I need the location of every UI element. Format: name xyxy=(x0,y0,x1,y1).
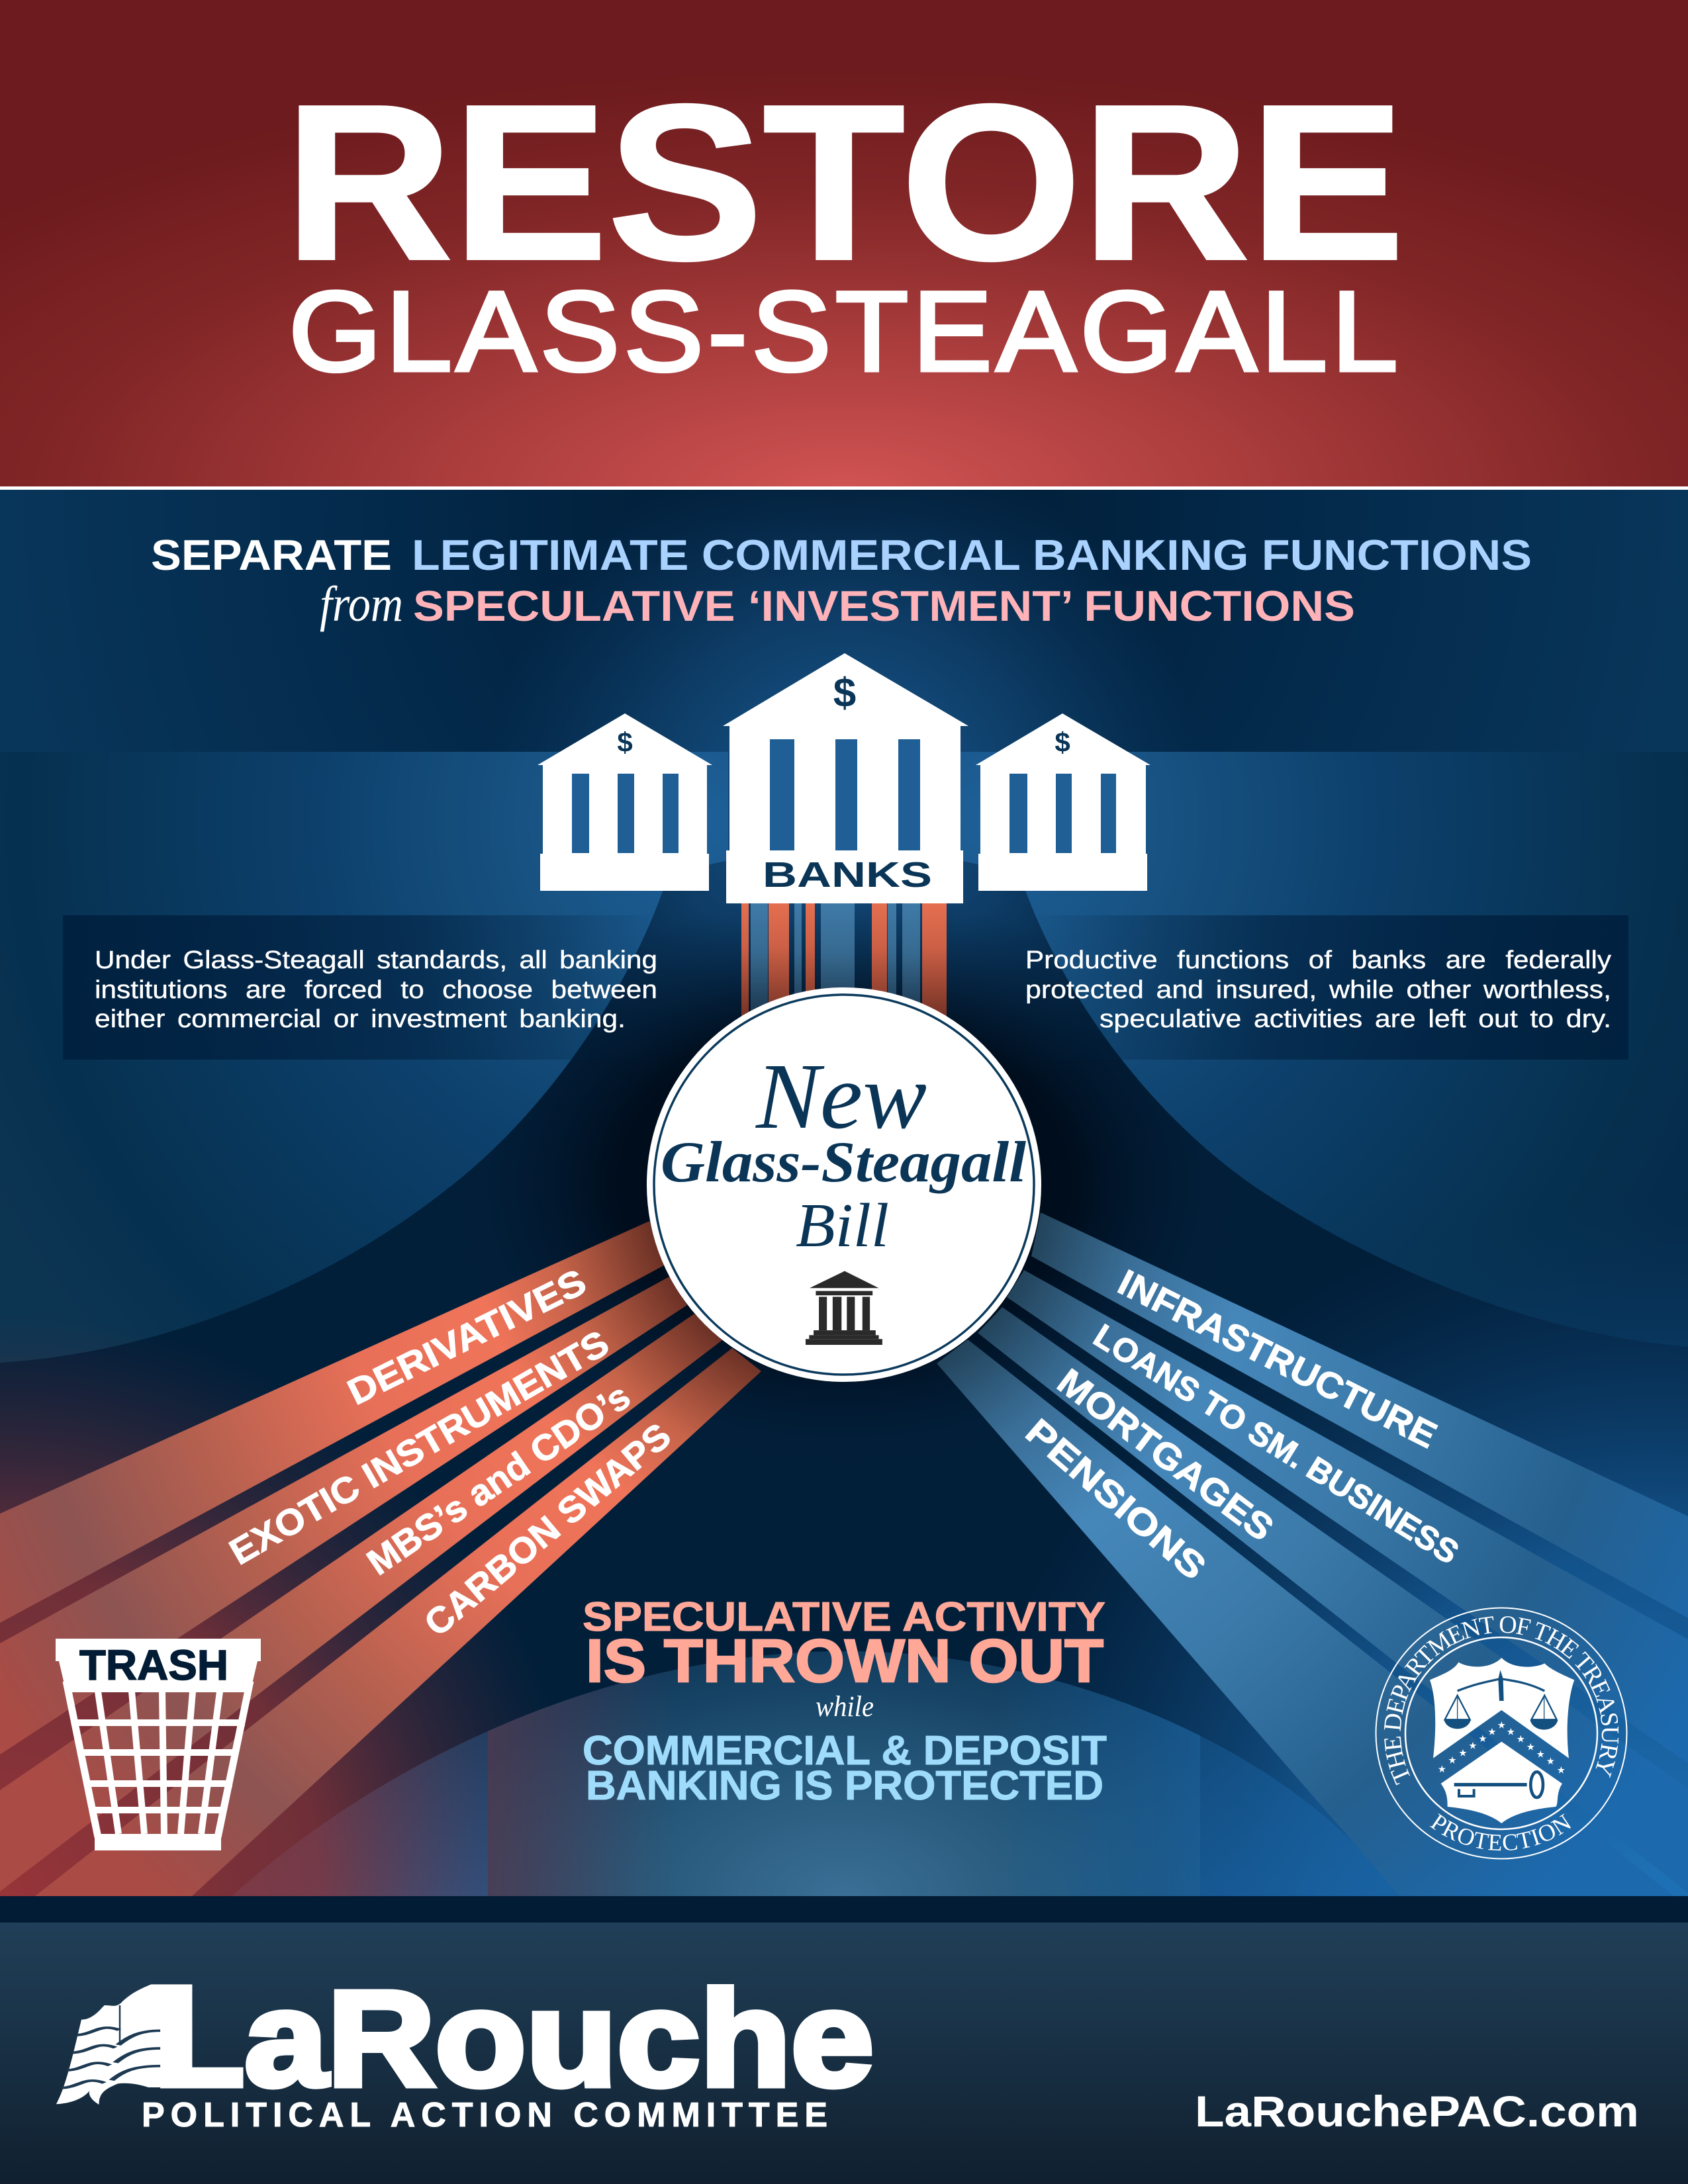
dark strip above footer xyxy=(0,1896,1688,1923)
panel: left explanation: institutions are forced to choose between xyxy=(95,976,657,1004)
heading: separate functions: LEGITIMATE COMMERCIAL BANKING FUNCTIONS xyxy=(412,531,1532,579)
panel: footer xyxy=(0,1923,1688,2184)
lower arc center panel xyxy=(488,1651,1200,1896)
icon: central bank: $ xyxy=(833,670,856,716)
seal: department of the treasury: ★ xyxy=(1448,1755,1457,1766)
lower arc xyxy=(232,1651,1400,1896)
panel: right explanation: protected and insured, while other worthless, xyxy=(1025,976,1611,1004)
icon: left bank: $ xyxy=(617,727,633,758)
labels on blue rays: LOANS TO SM. BUSINESS xyxy=(1087,1317,1466,1571)
logo: larouche wordmark: LaRouche xyxy=(154,1963,874,2115)
logo: flag xyxy=(56,1984,192,2105)
panel: left explanation: Under Glass-Steagall standards, all banking xyxy=(95,946,657,974)
icon: left bank xyxy=(538,713,712,891)
circle: new glass-steagall bill: Glass-Steagall xyxy=(661,1130,1027,1195)
seal: department of the treasury: ★ xyxy=(1478,1733,1487,1745)
icon: right bank: $ xyxy=(1055,727,1070,758)
seal: department of the treasury: PROTECTION xyxy=(1430,1813,1571,1850)
seal: department of the treasury: ★ xyxy=(1497,1719,1506,1731)
labels on blue rays: MORTGAGES xyxy=(1050,1361,1282,1549)
circle: new glass-steagall bill xyxy=(647,987,1041,1382)
subtitle: glass-steagall: GLASS-STEAGALL xyxy=(289,268,1398,395)
label: banks: BANKS xyxy=(763,855,932,895)
icon: trash can xyxy=(56,1639,261,1850)
orange rays xyxy=(0,1221,761,1896)
labels on blue rays xyxy=(1018,1261,1466,1588)
seal: department of the treasury: ★ xyxy=(1458,1748,1468,1759)
text block: speculative activity thrown out: COMMERCIAL & DEPOSIT xyxy=(583,1728,1107,1774)
seal: department of the treasury: ★ xyxy=(1468,1741,1477,1752)
seal: department of the treasury: ★ xyxy=(1546,1756,1555,1767)
labels on orange rays: EXOTIC INSTRUMENTS xyxy=(222,1322,616,1572)
text block: speculative activity thrown out xyxy=(583,1594,1107,1809)
labels on orange rays xyxy=(222,1261,679,1644)
text block: speculative activity thrown out: while xyxy=(816,1690,874,1723)
seal: department of the treasury: ★ xyxy=(1438,1764,1446,1775)
text block: speculative activity thrown out: BANKING IS PROTECTED xyxy=(586,1763,1103,1809)
seal: department of the treasury: ★ xyxy=(1557,1764,1566,1776)
seal: department of the treasury xyxy=(1376,1607,1627,1860)
panel: right explanation: speculative activities are left out to dry. xyxy=(1100,1005,1611,1033)
circle: new glass-steagall bill: Bill xyxy=(796,1191,889,1260)
panel: right explanation: Productive functions of banks are federally xyxy=(1025,946,1611,974)
labels on orange rays: MBS’s and CDO’s xyxy=(359,1375,637,1583)
vertical stripes under banks xyxy=(741,903,947,1016)
labels on blue rays: PENSIONS xyxy=(1018,1410,1214,1588)
panel: right explanation xyxy=(1025,915,1628,1060)
title: restore: RESTORE xyxy=(285,59,1405,306)
seal: department of the treasury: ★ xyxy=(1517,1734,1525,1745)
heading: separate functions xyxy=(151,531,1532,632)
panel: left explanation xyxy=(63,915,662,1060)
heading: separate functions: from xyxy=(320,576,403,632)
seal: department of the treasury: ★ xyxy=(1526,1742,1535,1753)
text block: speculative activity thrown out: IS THROWN OUT xyxy=(586,1627,1103,1695)
labels on orange rays: DERIVATIVES xyxy=(341,1261,592,1413)
panel: header xyxy=(0,0,1688,490)
blue rays xyxy=(937,1212,1688,1896)
right curtain xyxy=(960,752,1688,1347)
left curtain xyxy=(0,752,728,1363)
panel: main background xyxy=(0,490,1688,1896)
heading: separate functions: SEPARATE xyxy=(151,531,392,579)
circle: new glass-steagall bill: New xyxy=(755,1044,927,1148)
icon: right bank xyxy=(976,713,1150,891)
seal: department of the treasury: ★ xyxy=(1487,1726,1497,1737)
seal: department of the treasury: ★ xyxy=(1536,1749,1545,1760)
labels on blue rays: INFRASTRUCTURE xyxy=(1111,1261,1444,1456)
labels on orange rays: CARBON SWAPS xyxy=(416,1415,679,1644)
url: LaRouchePAC.com xyxy=(1195,2087,1639,2136)
panel: left explanation: either commercial or investment banking. xyxy=(95,1005,626,1033)
heading: separate functions: SPECULATIVE ‘INVESTMENT’ FUNCTIONS xyxy=(413,582,1355,630)
icon: central bank xyxy=(723,653,968,903)
label: trash: TRASH xyxy=(79,1641,228,1689)
seal: department of the treasury: THE DEPARTMENT OF THE TREASURY xyxy=(1383,1616,1618,1786)
icon: small bank xyxy=(806,1271,882,1345)
logo: political action committee: POLITICAL ACTION COMMITTEE xyxy=(142,2096,827,2134)
text block: speculative activity thrown out: SPECULATIVE ACTIVITY xyxy=(583,1594,1105,1640)
seal: department of the treasury: ★ xyxy=(1507,1726,1515,1737)
